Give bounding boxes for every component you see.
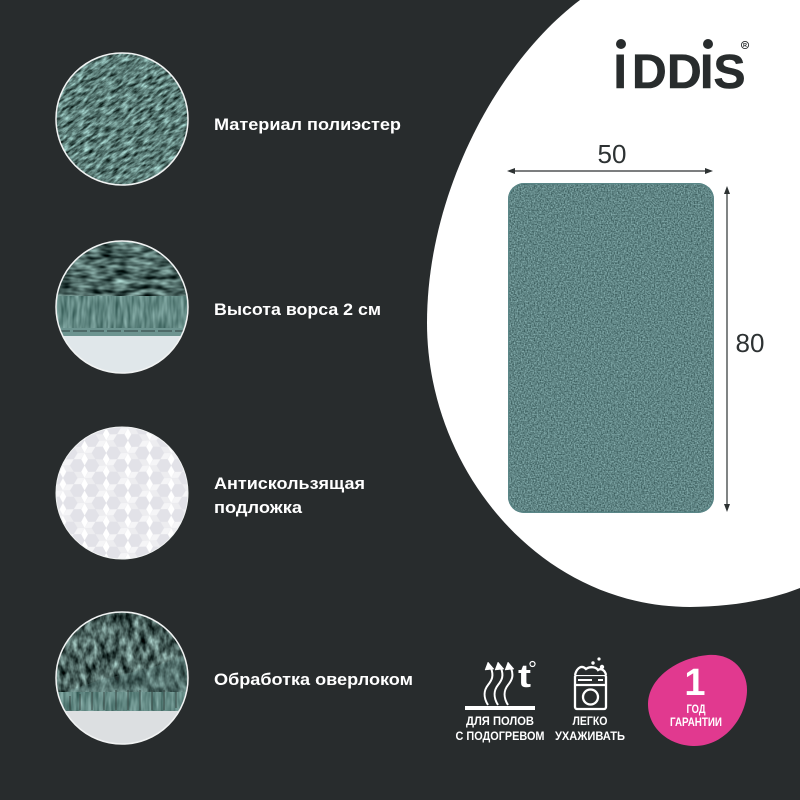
product: bath mat	[508, 183, 714, 513]
circle outline 4	[56, 612, 188, 744]
feature 4: overlock	[56, 612, 413, 745]
badge blob	[648, 655, 747, 746]
label: easy care: УХАЖИВАТЬ	[555, 729, 625, 743]
feature 2: pile height	[56, 241, 381, 374]
icon: heat arrows	[485, 662, 514, 705]
badge text: ГОД	[686, 704, 706, 716]
icon: floor line	[465, 706, 535, 710]
circle outline 3	[56, 427, 188, 559]
icon: degree ring	[530, 662, 535, 666]
label: heated floors: С ПОДОГРЕВОМ	[456, 729, 544, 743]
icon: washing machine	[575, 657, 606, 709]
photo: anti-slip pattern	[56, 427, 188, 559]
badge number: 1	[684, 662, 706, 704]
feature 1: material	[55, 52, 400, 186]
circle outline 1	[56, 53, 188, 185]
badge: warranty	[648, 655, 747, 746]
photo: fleece close-up	[56, 54, 188, 184]
dimension: height	[724, 186, 764, 512]
icon block: underfloor heating	[456, 658, 544, 743]
label: overlock: Обработка оверлоком	[214, 670, 413, 689]
photo: pile side view	[56, 241, 188, 374]
dimension: width: 50	[598, 139, 626, 169]
logo: iddis: IDDIS	[614, 46, 746, 99]
label: material: Материал полиэстер	[214, 115, 401, 134]
label: anti-slip: Антискользящая	[214, 474, 365, 493]
logo: iddis: R	[743, 43, 747, 49]
badge text: ГАРАНТИИ	[670, 717, 722, 729]
dimension: height: 80	[736, 328, 764, 358]
dimension: width	[507, 139, 713, 174]
feature 3: anti-slip backing	[56, 427, 365, 559]
panel: white product area	[427, 0, 800, 607]
label: anti-slip: подложка	[214, 498, 303, 517]
icon block: easy care	[555, 657, 625, 743]
icon: temperature mark: t	[518, 658, 531, 694]
circle outline 2	[56, 241, 188, 373]
photo: overlock edge	[56, 612, 188, 745]
label: pile height: Высота ворса 2 см	[214, 300, 381, 319]
label: easy care: ЛЕГКО	[572, 714, 608, 728]
label: heated floors: ДЛЯ ПОЛОВ	[466, 714, 534, 728]
